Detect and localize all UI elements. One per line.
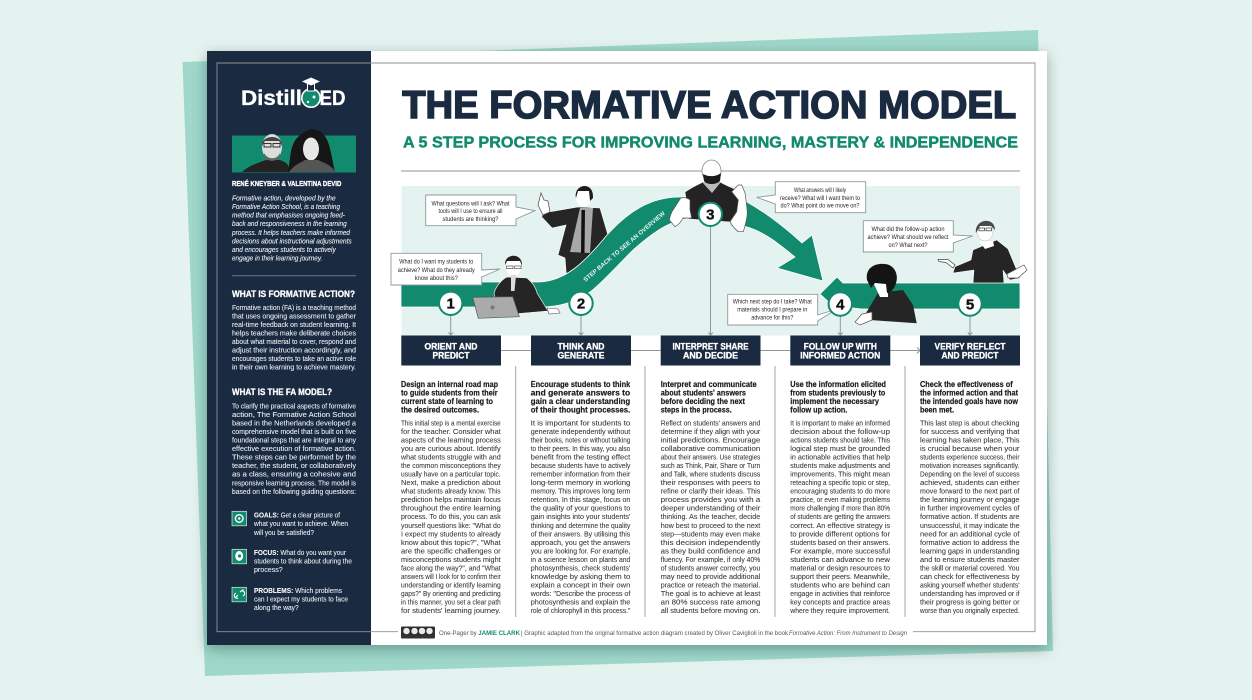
column 4 body: decision about the follow-up — [790, 427, 890, 436]
column 5 heading: the informed action and that — [920, 388, 1018, 398]
column 3 body: deeper understanding of their — [661, 504, 761, 513]
column 2 body: benefit from the testing effect — [531, 452, 631, 462]
column 4 body: logical step must be grounded — [790, 444, 890, 453]
text: focus — [254, 548, 352, 574]
column 5 body: need for an additional cycle of — [920, 529, 1020, 538]
figure: student at desk — [855, 264, 917, 325]
column 2 body — [530, 418, 631, 615]
column 5: verify reflect and predict — [919, 379, 1020, 615]
text: what is the FA model: foundational steps that are integral to any — [232, 436, 356, 444]
column 5 body: unsuccessful, it may indicate the — [920, 521, 1020, 530]
column 2 body: you are looking for. For example, — [531, 546, 630, 555]
text: what is the FA model: responsive learning process. The model is — [232, 478, 356, 487]
column 5 body: students experience success, their — [920, 452, 1020, 462]
step box 5: VERIFY REFLECT — [934, 342, 1006, 352]
column 4 body: where they require improvement. — [789, 606, 890, 615]
column 4 body: students make adjustments and — [790, 461, 890, 470]
column 4 body: correct. An effective strategy is — [790, 521, 890, 530]
text: what is the FA model: action, The Formative Action School — [232, 410, 356, 419]
column 4 body: It is important to make an informed — [790, 418, 890, 427]
text: what is formative action: about what material to cover, respond and — [232, 337, 356, 346]
column 2 body: the quality of your questions to — [531, 504, 630, 513]
column 1 heading — [401, 379, 498, 415]
column 5 body: for success and verifying that — [920, 427, 1020, 436]
column 5 body: understanding has improved or if — [920, 589, 1020, 598]
text: problems: along the way? — [254, 603, 299, 612]
column 5 heading — [920, 379, 1018, 415]
text: what is formative action: real-time feedback on student learning. It — [232, 320, 357, 329]
step box 4: INFORMED ACTION — [800, 351, 880, 361]
column 4 body: For example, more successful — [790, 546, 890, 555]
column 2 body: thinking and determine the quality — [531, 521, 630, 530]
column 2 heading: gain a clear understanding — [531, 396, 630, 406]
column 2 heading — [531, 379, 630, 415]
speech bubble: step 2: What questions will I ask? What — [432, 200, 510, 207]
column 1 body: misconceptions students might — [401, 555, 502, 564]
column 4 body: encouraging students to do more — [790, 487, 890, 496]
column 1: orient and predict — [400, 379, 502, 615]
column 3 body: determine if they align with your — [661, 427, 761, 436]
column 1 body: in this manner, you set a clear path — [401, 598, 501, 607]
column 3 body: Reflect on students' answers and — [661, 418, 760, 427]
figure: teacher reflecting — [938, 221, 1027, 284]
column 3 body: fluency. For example, if only 40% — [661, 555, 761, 564]
column 5 body: formative action. If students are — [920, 512, 1020, 521]
step box 5 — [920, 336, 1020, 366]
step marker 3: 3 — [706, 207, 714, 224]
step box 2: THINK AND — [558, 342, 604, 352]
speech bubble: step 4: Which next step do I take? What — [733, 299, 812, 306]
column 4 body: improvements. This might mean — [790, 470, 890, 478]
text: what is the FA model: comprehensive model that is built on five — [232, 427, 356, 436]
column 2 body: photosynthesis and explain the — [531, 598, 630, 607]
column 3 body: their responses with peers to — [661, 478, 760, 487]
author portraits — [232, 129, 356, 172]
step marker 1 — [439, 292, 462, 315]
column 1 heading: the desired outcomes. — [401, 405, 479, 415]
text: what is the FA model: teacher, the student, or collaboratively — [232, 461, 356, 470]
text: what is the FA model: based on the following guiding questions: — [232, 487, 356, 496]
speech bubble: step 2: students are thinking? — [442, 216, 499, 223]
column 4 heading: implement the necessary — [790, 396, 879, 406]
credit line — [439, 630, 907, 637]
column 5 body: in further improvement cycles of — [920, 504, 1020, 513]
column 5 body: asking yourself whether students' — [920, 581, 1020, 590]
subtitle: A 5 STEP PROCESS FOR IMPROVING LEARNING, MASTERY & INDEPENDENCE — [403, 134, 1018, 152]
column 3 heading: steps in the process. — [661, 405, 732, 415]
column 3 heading — [661, 379, 757, 415]
column 1 body: what students struggle with and — [400, 452, 501, 462]
speech bubble: step 5: achieve? What should we reflect — [868, 234, 949, 241]
column 1 body: yourself questions like: "What do — [401, 521, 501, 530]
intro text: Formative action, developed by the — [232, 193, 336, 202]
speech bubble: step 4 — [728, 294, 837, 325]
column 4 body: engage in activities that reinforce — [790, 589, 890, 598]
text: what is the FA model: as a class, ensuring a cohesive and — [232, 470, 356, 479]
column 3 body: an 80% success rate among — [661, 598, 760, 607]
intro text: back and responsiveness in the learning — [232, 219, 347, 228]
column 5 heading: the intended goals have now — [920, 396, 1018, 406]
column 1 body: know about this topic?", "What — [401, 538, 502, 547]
column 1 body: I expect my students to already — [401, 529, 501, 538]
column 5 body: the learning journey or engage — [920, 495, 1020, 504]
column 4 heading: follow up action. — [790, 405, 847, 415]
column 4 body: to provide different options for — [790, 529, 890, 538]
credit line: Formative Action: From Instrument to Design — [789, 630, 907, 637]
text: what is formative action — [232, 303, 357, 372]
step marker 2: 2 — [577, 296, 585, 313]
column 1 body: face along the way?", and "What — [401, 564, 501, 572]
column 3 body: initial predictions. Encourage — [661, 435, 760, 444]
column 2 body: approach, you get the answers — [531, 538, 630, 547]
column 2 body: words: "Describe the process of — [530, 589, 631, 598]
step box 4 — [790, 336, 890, 366]
speech bubble: step 1 — [391, 253, 500, 285]
text: focus: process? — [254, 565, 283, 574]
text: goals — [253, 511, 348, 537]
heading: what is the FA model: WHAT IS THE FA MODEL? — [232, 387, 332, 397]
column 1 body: answers will I look for to confirm their — [401, 572, 501, 581]
column 5 body: learning has taken place, This — [920, 435, 1020, 444]
column 3 body: of students answer correctly, you — [661, 564, 760, 572]
column 2 body: It is important for students to — [531, 418, 630, 427]
column 3 body: as they build confidence and — [661, 546, 760, 555]
column 3 body: about their answers. Use strategies — [661, 452, 760, 462]
speech bubble: step 3 — [757, 182, 866, 213]
credit line: One-Pager by — [439, 630, 478, 637]
text: what is the FA model — [232, 401, 357, 496]
column 1 body: Next, make a prediction about — [401, 478, 502, 487]
step box 3: AND DECIDE — [683, 351, 738, 361]
column 1 body: prediction helps maintain focus — [401, 495, 501, 504]
column 1 body: usually have on a particular topic. — [401, 470, 501, 478]
column 5 heading: been met. — [920, 405, 954, 415]
icon: goals — [232, 511, 246, 526]
column 4 body: practice, or even making problems — [790, 495, 890, 504]
column 5 body: their progress is going better or — [920, 598, 1020, 607]
column 3 body — [661, 418, 761, 615]
column 4 body: reteaching a specific topic or step, — [790, 478, 890, 487]
column 3 heading: about students' answers — [661, 388, 746, 398]
column 2 heading: and generate answers to — [531, 388, 630, 398]
column 3 body: such as Think, Pair, Share or Turn — [661, 461, 760, 470]
column 3 body: thinking. As the teacher, decide — [661, 512, 760, 521]
text: goals: will you be satisfied? — [253, 528, 314, 537]
intro text: decisions about instructional adjustments — [232, 236, 352, 245]
column 5 body: learning gaps in understanding — [920, 546, 1020, 555]
column 5 body: is crucial because when your — [920, 444, 1020, 453]
text: what is the FA model: To clarify the practical aspects of formative — [232, 401, 356, 410]
column 1 body: This initial step is a mental exercise — [401, 418, 501, 427]
icon: problems — [232, 587, 246, 602]
step marker 4 — [829, 292, 852, 316]
column 3 body: how best to proceed to the next — [661, 521, 761, 530]
speech bubble: step 4: advance for this? — [751, 315, 794, 322]
column 4 body: more challenging if more than 80% — [790, 504, 890, 513]
column 4 heading: from students previously to — [790, 388, 885, 398]
text: problems — [254, 586, 348, 612]
text: what is the FA model: These steps can be performed by the — [232, 453, 356, 462]
column 2 body: of their answers. By utilising this — [531, 529, 630, 538]
column 3 body: process provides you with a — [661, 495, 761, 504]
column 2 body: photosynthesis, check students' — [531, 564, 631, 572]
speech bubble: step 1: know about this? — [415, 275, 458, 282]
logo: DistillED: Distill — [241, 86, 302, 110]
icon: focus — [232, 549, 246, 564]
column 2 body: role of chlorophyll in this process." — [531, 606, 631, 615]
column 3: interpret share and decide — [661, 379, 761, 615]
column 2 body: retention. In this stage, focus on — [531, 495, 630, 504]
column 5 body: Depending on the level of success — [920, 470, 1020, 478]
column 1 body: throughout the entire learning — [401, 504, 501, 513]
step marker 4: 4 — [836, 296, 845, 313]
column 4 body: of students are getting the answers — [790, 512, 890, 521]
text: focus: students to think about during the — [254, 556, 352, 566]
column 1 body: gaps?" By orienting and predicting — [401, 589, 501, 598]
column 3 body: may need to provide additional — [661, 572, 761, 581]
column 2 body: memory. This improves long term — [531, 487, 630, 496]
column 1 body: are the specific challenges or — [401, 546, 501, 555]
speech bubble: step 1: What do I want my students to — [399, 259, 474, 266]
column 5 body: formative action to address the — [920, 538, 1020, 547]
column 2 body: generate independently without — [531, 427, 631, 436]
column 2 body: explain a concept in their own — [531, 581, 630, 590]
column 2 body: knowledge by asking them to — [531, 572, 630, 581]
speech bubble: step 1: achieve? What do they already — [398, 267, 476, 274]
column 3 body: all students before moving on. — [661, 606, 760, 615]
intro text — [231, 193, 352, 263]
intro text: process. It helps teachers make informed — [231, 228, 351, 237]
ribbon label: STEP BACK TO SEE AN OVERVIEW — [583, 211, 667, 284]
logo: DistillED — [241, 78, 346, 110]
column 2 body: because students have to actively — [531, 461, 630, 470]
column 1 heading: to guide students from their — [401, 388, 498, 398]
speech bubble: step 2: tools will I use to ensure all — [438, 208, 502, 215]
back sheet — [182, 30, 1053, 676]
main sheet — [207, 51, 1047, 645]
text: what is formative action: Formative action (FA) is a teaching method — [232, 303, 356, 312]
column 2 body: long-term memory in working — [531, 478, 630, 487]
column 1 body: what students already know. This — [400, 487, 501, 496]
text: what is formative action: helps teachers make deliberate choices — [232, 328, 356, 338]
heading: what is formative action: WHAT IS FORMATIVE ACTION? — [232, 289, 355, 299]
text: what is formative action: in their own learning to achieve mastery. — [232, 362, 356, 372]
step box 3 — [661, 336, 760, 366]
column 1 body — [400, 418, 502, 615]
title: THE FORMATIVE ACTION MODEL — [402, 84, 1016, 127]
column 3 body: collaborative communication — [661, 444, 760, 453]
column 5 body: move forward to the next part of — [920, 487, 1020, 496]
step box 5: AND PREDICT — [942, 351, 999, 361]
ribbon: steps 1 to 4 — [401, 197, 823, 307]
column 1 heading: current state of learning to — [401, 396, 493, 406]
intro text: Formative Action School, is a teaching — [232, 202, 340, 211]
step box 1 — [401, 336, 501, 366]
step box 4: FOLLOW UP WITH — [804, 342, 877, 352]
intro text: engage in their learning journey. — [232, 254, 322, 263]
column 5 body: the skill or material covered. You — [920, 564, 1020, 572]
speech bubble: step 3: do? What point do we move on? — [780, 203, 860, 210]
credit line: | Graphic adapted from the original formative action diagram created by Oliver Caviglioli in the book — [521, 630, 789, 637]
speech bubble: step 5 — [863, 221, 973, 252]
figure: teacher pointing — [538, 186, 608, 280]
column 1 body: for the teacher. Consider what — [401, 427, 502, 436]
column 4 body: students can advance to new — [790, 555, 891, 564]
column 1 body: process. To do this, you can ask — [401, 512, 501, 521]
column 5 body: worse than you originally expected. — [919, 606, 1020, 615]
credit line: JAMIE CLARK — [478, 630, 520, 637]
column 4 body: key concepts and practice areas — [790, 598, 890, 607]
column 4: follow up with informed action — [789, 379, 891, 615]
connectors — [448, 226, 972, 354]
authors: RENÉ KNEYBER & VALENTINA DEVID — [232, 179, 342, 188]
text: goals: what you want to achieve. When — [253, 519, 348, 528]
speech bubble: step 2 — [426, 195, 535, 226]
speech bubble: step 5: on? What next? — [888, 242, 928, 249]
text: goals: GOALS: Get a clear picture of — [254, 511, 341, 520]
text: what is the FA model: effective execution of formative action. — [232, 444, 356, 453]
column 2 heading: of their thought processes. — [531, 405, 630, 415]
speech bubble: step 5: What did the follow-up action — [872, 226, 945, 233]
speech bubble: step 3: receive? What will I want them to — [780, 195, 860, 202]
column 3 body: The goal is to achieve at least — [661, 589, 761, 598]
text: problems: can I expect my students to face — [254, 594, 348, 604]
column 3 body: refine or clarify their ideas. This — [661, 487, 760, 496]
intro text: method that emphasises ongoing feed- — [232, 211, 345, 220]
column 1 body: for students' learning journey. — [401, 606, 501, 615]
text: what is formative action: adjust their instruction accordingly, and — [232, 346, 356, 354]
column 2: think and generate — [530, 379, 631, 615]
step box 1: ORIENT AND — [424, 342, 478, 352]
column 4 body: in actionable activities that help — [790, 452, 890, 462]
panel: process diagram — [391, 160, 1027, 366]
column 3 body: step—students may even make — [661, 529, 760, 538]
column 1 body: aspects of the learning process — [401, 435, 501, 444]
column 5 body: This last step is about checking — [920, 418, 1020, 427]
footer credits — [401, 626, 907, 638]
step marker 1: 1 — [447, 296, 455, 313]
column 3 body: and Talk, where students discuss — [661, 470, 760, 478]
figure: teacher explaining — [669, 160, 747, 232]
figure: teacher seated at laptop — [473, 256, 560, 318]
column 5 body: can check for effectiveness by — [920, 572, 1020, 581]
text: problems: PROBLEMS: Which problems — [254, 586, 342, 595]
column 5 body: achieved, students can either — [920, 478, 1020, 487]
column 4 body: material or design resources to — [790, 564, 890, 572]
column 2 heading: Encourage students to think — [531, 379, 630, 389]
column 5 body: and to ensure students master — [920, 555, 1020, 564]
intro text: and encourages students to actively — [232, 245, 337, 254]
step box 2 — [531, 336, 631, 366]
column 1 body: understanding or identify learning — [401, 581, 501, 590]
column 4 heading — [790, 379, 886, 415]
column 2 body: their books, notes or without talking — [531, 435, 630, 444]
column 4 body: actions students should take. This — [790, 435, 890, 444]
column 1 heading: Design an internal road map — [401, 379, 498, 389]
step box 3: INTERPRET SHARE — [672, 342, 749, 352]
step marker 2 — [569, 292, 593, 315]
column 5 body — [919, 418, 1020, 615]
column 4 body: students based on their answers. — [790, 538, 890, 547]
column 2 body: remember information from their — [531, 470, 631, 478]
text: focus: FOCUS: What do you want your — [254, 548, 346, 557]
step box 1: PREDICT — [432, 351, 470, 361]
column 4 body: support their peers. Meanwhile, — [790, 572, 890, 581]
icon: creative commons badge — [401, 626, 435, 638]
step marker 5: 5 — [966, 296, 974, 313]
column 5 heading: Check the effectiveness of — [920, 379, 1013, 389]
text: what is formative action: that uses ongoing assessment to gather — [232, 312, 356, 320]
text: what is the FA model: based in the Netherlands developed a — [232, 418, 357, 427]
step marker 5 — [958, 292, 982, 316]
step marker 3 — [699, 203, 722, 226]
speech bubble: step 3: What answers will I likely — [794, 187, 847, 194]
column 4 heading: Use the information elicited — [790, 379, 886, 389]
column 2 body: to their peers. In this way, you also — [531, 444, 630, 453]
column 4 body — [789, 418, 891, 615]
ribbon: steps 4 to 5 — [820, 277, 1020, 309]
column 3 heading: Interpret and communicate — [661, 379, 757, 389]
column 3 heading: before deciding the next — [661, 396, 745, 406]
column 1 body: you are curious about. Identify — [401, 444, 501, 453]
column 2 body: in a science lesson on plants and — [531, 555, 630, 564]
speech bubble: step 4: materials should I prepare in — [737, 307, 808, 314]
column 4 body: students who are behind can — [790, 581, 890, 590]
logo: DistillED: ED — [320, 86, 346, 110]
step box 2: GENERATE — [558, 351, 605, 361]
column 5 body: motivation increases significantly. — [920, 461, 1020, 470]
column 3 body: practice or reteach the material. — [661, 581, 760, 590]
panel: sidebar — [207, 51, 371, 645]
text: what is formative action: encourages students to take an active role — [232, 354, 356, 363]
column 1 body: the common misconceptions they — [401, 461, 501, 470]
column 3 body: this decision independently — [661, 538, 761, 547]
column 2 body: gain insights into your students' — [531, 512, 631, 521]
